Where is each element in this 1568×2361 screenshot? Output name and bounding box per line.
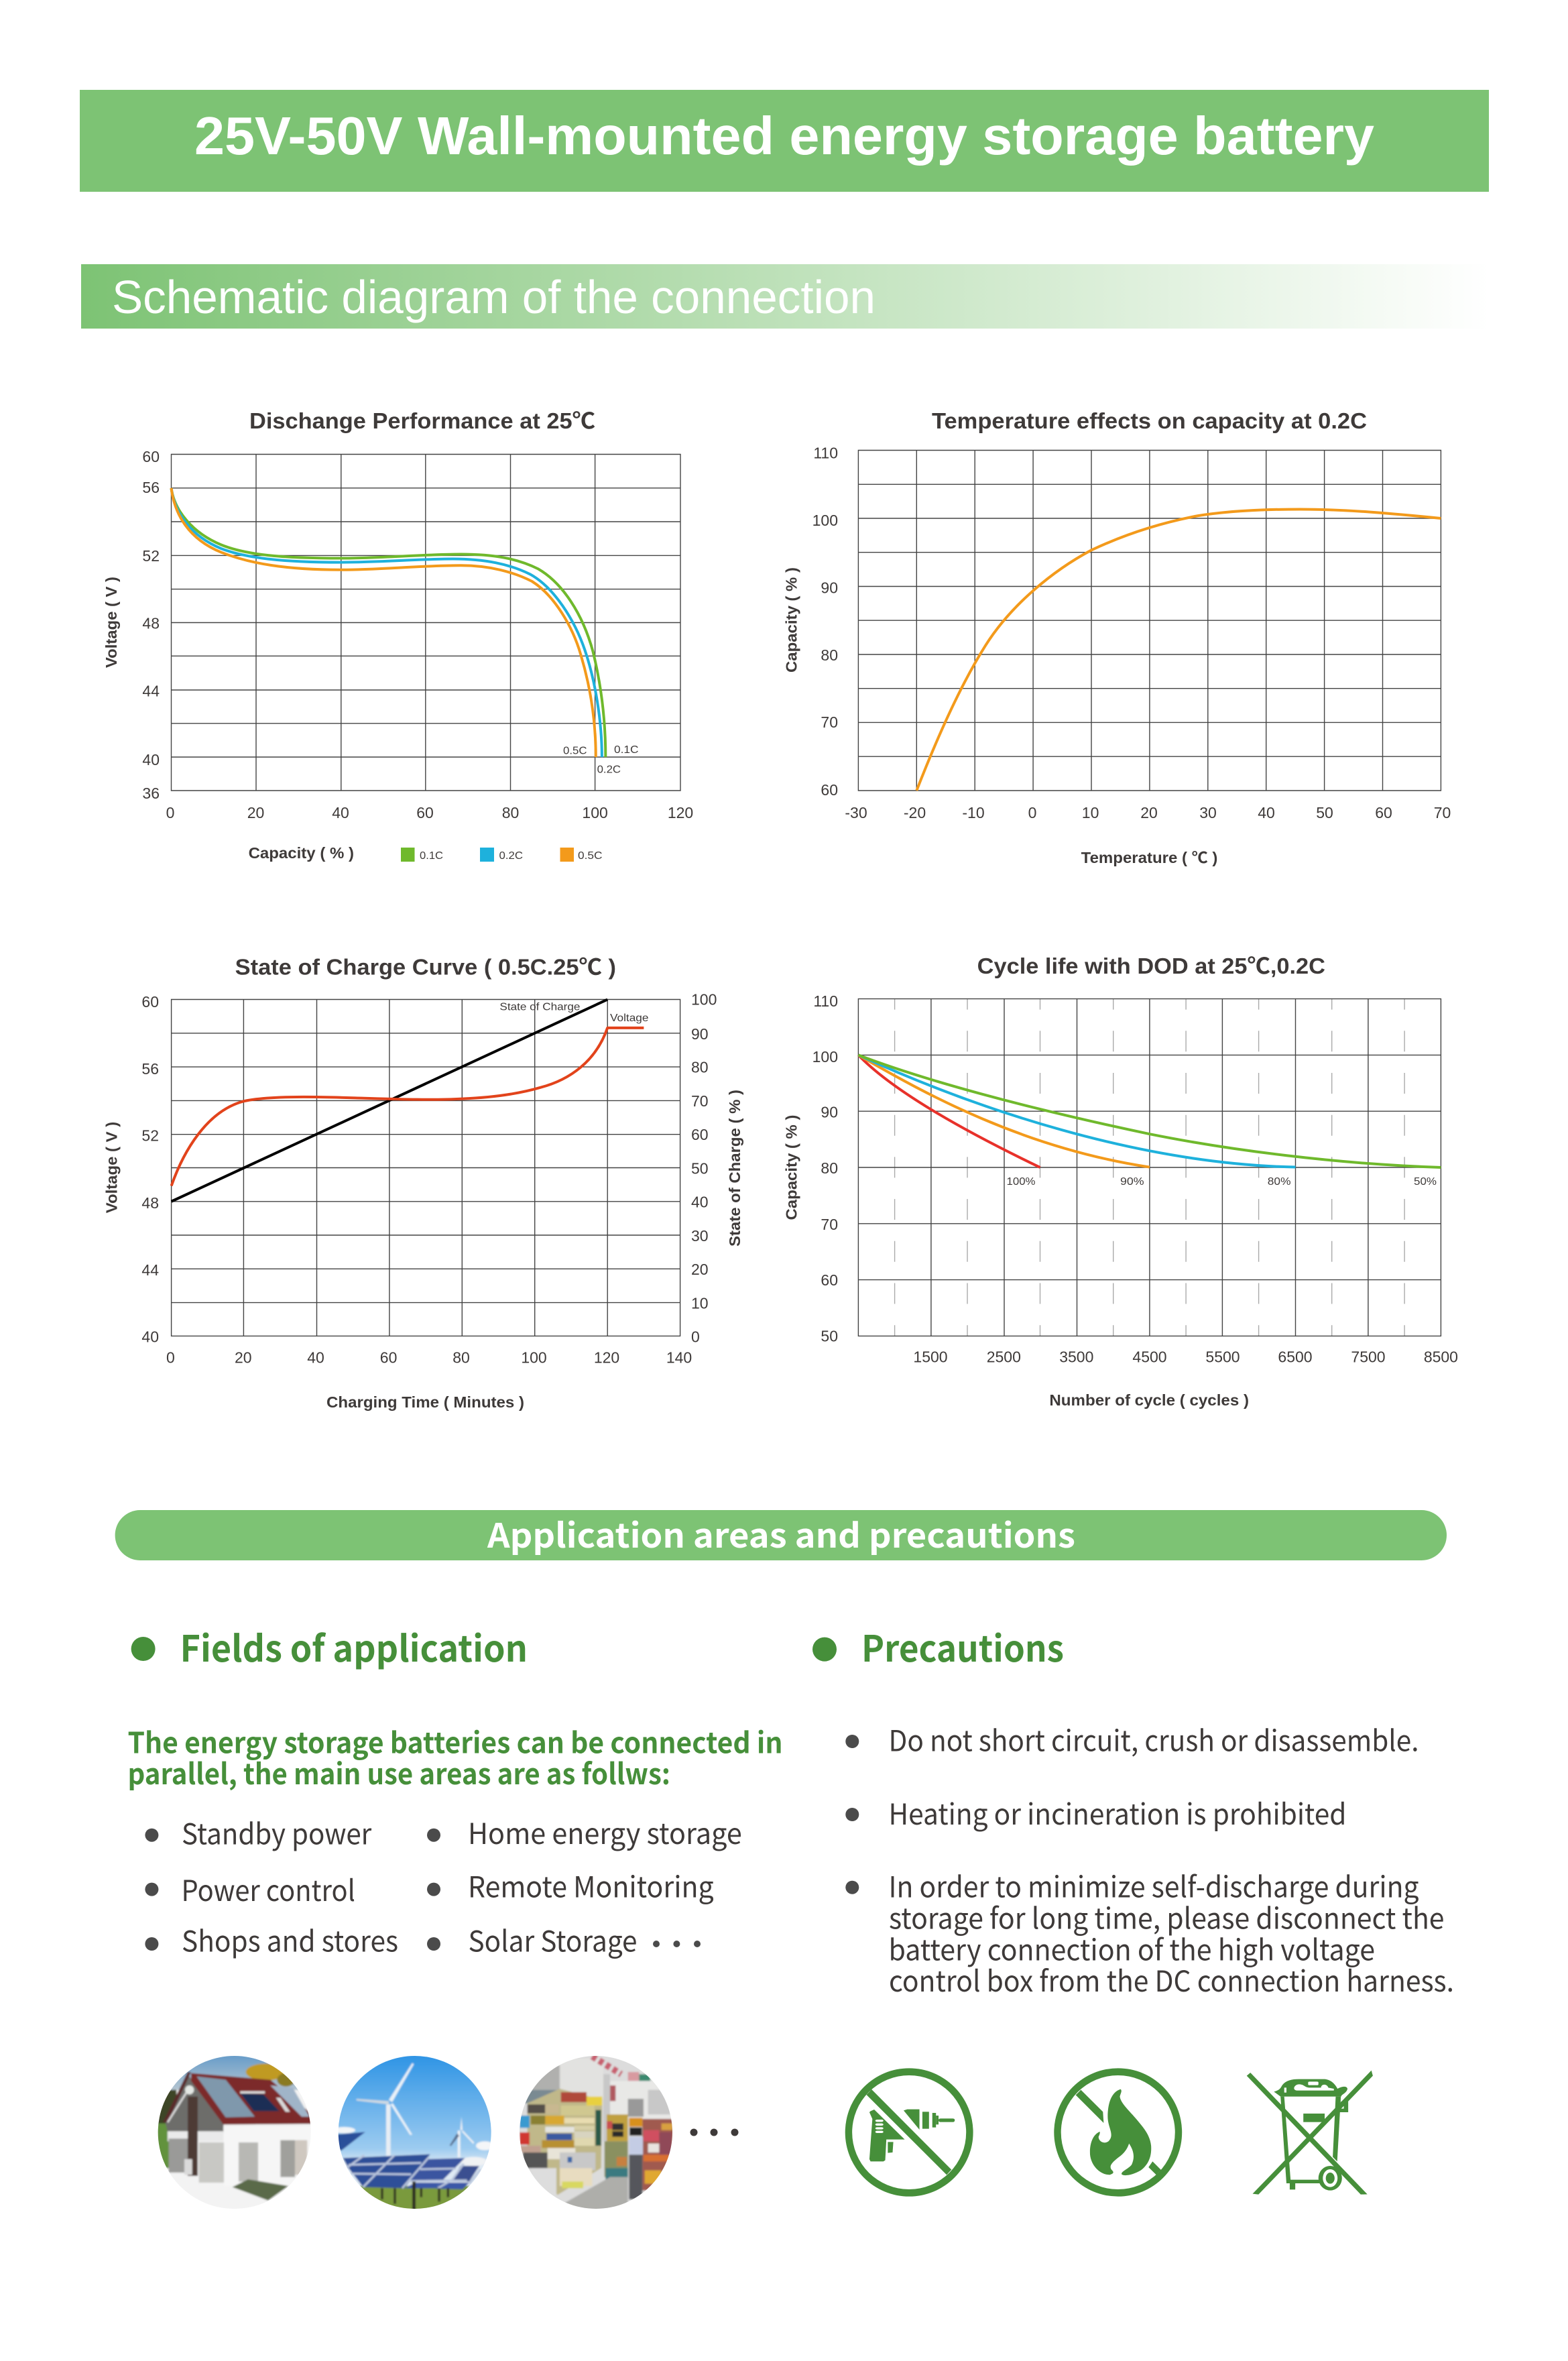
precautions list: Do not short circuit, crush or disassemble. <box>889 1719 1419 1760</box>
heading: Precautions <box>861 1619 1064 1672</box>
right y axis labels: 30 <box>691 1227 709 1245</box>
right y axis labels: 60 <box>691 1126 709 1143</box>
plot grid <box>172 999 680 1336</box>
x axis labels: 40 <box>332 804 349 821</box>
application list: Shops and stores <box>182 1918 398 1960</box>
curve labels: 0.5C <box>563 746 587 756</box>
y axis labels: 40 <box>142 751 160 768</box>
x axis labels: 40 <box>307 1348 324 1366</box>
right y axis labels: 100 <box>691 991 717 1009</box>
x axis labels <box>845 804 1451 821</box>
curve labels: 100% <box>1007 1176 1035 1188</box>
x axis labels: 120 <box>594 1348 619 1366</box>
left y axis title: Voltage ( V ) <box>103 1122 121 1213</box>
x axis labels: 60 <box>1375 804 1392 821</box>
intro text: The energy storage batteries can be connected in <box>127 1721 783 1762</box>
right y axis title: State of Charge ( % ) <box>726 1090 743 1247</box>
x axis labels <box>166 1348 692 1366</box>
chart title: State of Charge Curve ( 0.5C.25℃ ) <box>235 954 616 979</box>
plot grid <box>858 999 1441 1336</box>
x axis labels: -10 <box>962 804 985 821</box>
curve labels: 80% <box>1268 1176 1291 1188</box>
y axis title: Capacity ( % ) <box>783 1114 800 1220</box>
application list: Solar Storage <box>468 1918 637 1960</box>
curves <box>858 1055 1441 1167</box>
x axis title: Temperature ( ℃ ) <box>1081 849 1217 866</box>
x axis labels <box>913 1348 1458 1365</box>
chart title: Cycle life with DOD at 25℃,0.2C <box>977 954 1325 978</box>
title banner: 25V-50V Wall-mounted energy storage battery <box>194 106 1375 166</box>
y axis labels <box>812 444 838 799</box>
x axis labels: 50 <box>1316 804 1333 821</box>
right y axis labels: 50 <box>691 1160 709 1177</box>
y axis labels: 110 <box>813 992 838 1010</box>
precautions list: battery connection of the high voltage <box>889 1927 1375 1969</box>
y axis labels: 36 <box>142 785 160 802</box>
chart title: Temperature effects on capacity at 0.2C <box>932 408 1367 433</box>
y axis labels: 110 <box>813 444 838 461</box>
y axis labels: 100 <box>812 1048 838 1066</box>
line chart: temperature effects <box>783 408 1451 866</box>
application list: Power control <box>181 1868 355 1910</box>
icon: no disassembly drill <box>845 2068 973 2197</box>
y axis title: Voltage ( V ) <box>103 577 120 668</box>
x axis labels: 0 <box>1028 804 1036 821</box>
y axis labels: 80 <box>821 646 838 664</box>
x axis labels: 20 <box>247 804 264 821</box>
right y axis labels: 20 <box>691 1261 709 1278</box>
x axis labels: 20 <box>235 1348 252 1366</box>
y axis labels: 44 <box>142 683 160 700</box>
y axis labels <box>142 448 160 802</box>
y axis labels: 48 <box>142 614 160 632</box>
curve labels: 50% <box>1414 1176 1437 1188</box>
x axis labels: 0 <box>166 804 174 821</box>
x axis title: Number of cycle ( cycles ) <box>1049 1391 1249 1409</box>
x axis labels: 10 <box>1082 804 1099 821</box>
x axis title: Charging Time ( Minutes ) <box>326 1393 524 1411</box>
application photos <box>154 2052 677 2213</box>
x axis labels: 0 <box>166 1348 175 1366</box>
precautions list: Heating or incineration is prohibited <box>889 1792 1346 1833</box>
curve labels <box>563 744 638 775</box>
curve labels: 0.2C <box>597 764 621 775</box>
line chart: cycle life <box>783 954 1458 1409</box>
x axis labels: 100 <box>521 1348 547 1366</box>
x axis labels: 120 <box>668 804 693 821</box>
x axis labels: 1500 <box>913 1348 948 1365</box>
precautions list <box>845 1719 1454 2000</box>
curves <box>172 1000 644 1202</box>
left y axis labels: 40 <box>141 1328 159 1345</box>
intro text: parallel, the main use areas are as follws: <box>127 1751 670 1793</box>
precautions list: In order to minimize self-discharge during <box>889 1864 1419 1906</box>
right y axis labels: 40 <box>691 1194 709 1211</box>
panel: precautions <box>812 1619 1454 2000</box>
plot grid <box>858 451 1441 791</box>
curve labels <box>1007 1176 1437 1188</box>
y axis labels: 52 <box>142 547 160 565</box>
legend: 0.2C <box>499 850 523 862</box>
x axis labels: 3500 <box>1059 1348 1093 1365</box>
x axis labels: 60 <box>380 1348 397 1366</box>
ellipsis dots <box>690 2128 739 2136</box>
right y axis labels: 0 <box>691 1328 700 1345</box>
x axis labels: 4500 <box>1132 1348 1167 1365</box>
x axis labels: 70 <box>1434 804 1451 821</box>
y axis labels: 56 <box>142 479 160 496</box>
y axis labels: 80 <box>821 1159 838 1177</box>
x axis labels: 7500 <box>1351 1348 1386 1365</box>
left y axis labels: 44 <box>141 1261 159 1279</box>
curves <box>171 488 605 757</box>
icon: no trash bin <box>1247 2071 1373 2195</box>
photo: house with solar roof <box>154 2052 315 2213</box>
y axis title: Capacity ( % ) <box>783 567 800 673</box>
curve labels: 0.1C <box>614 744 638 756</box>
x axis labels: 30 <box>1199 804 1217 821</box>
left y axis labels <box>141 993 159 1345</box>
plot grid <box>172 455 680 791</box>
application list: Standby power <box>182 1812 372 1853</box>
right y axis labels <box>691 991 717 1345</box>
legend <box>401 848 602 862</box>
x axis labels: 60 <box>416 804 434 821</box>
line chart: state of charge <box>103 954 743 1411</box>
left y axis labels: 56 <box>141 1060 159 1078</box>
section pill: application areas and precautions <box>115 1509 1447 1560</box>
right y axis labels: 10 <box>691 1294 709 1312</box>
x axis labels: 8500 <box>1424 1348 1458 1365</box>
intro text <box>127 1721 783 1793</box>
curve labels: 90% <box>1120 1176 1144 1188</box>
curve <box>916 509 1441 791</box>
x axis labels: 6500 <box>1278 1348 1313 1365</box>
legend: 0.1C <box>420 850 443 862</box>
x axis labels: 80 <box>453 1348 470 1366</box>
x axis labels: -30 <box>845 804 867 821</box>
application list: Home energy storage <box>468 1811 742 1853</box>
y axis labels: 50 <box>821 1328 838 1345</box>
y axis labels <box>812 992 838 1345</box>
x axis labels: 140 <box>666 1348 692 1366</box>
chart title: Dischange Performance at 25℃ <box>249 408 595 433</box>
x axis labels: 100 <box>582 804 608 821</box>
section banner: schematic diagram <box>81 264 1489 329</box>
application list <box>145 1811 742 1960</box>
x axis labels: 2500 <box>987 1348 1021 1365</box>
legend: 0.5C <box>578 850 602 862</box>
heading: Fields of application <box>180 1619 528 1672</box>
panel: fields of application <box>127 1619 783 1960</box>
left y axis labels: 48 <box>141 1194 159 1212</box>
x axis labels: 20 <box>1140 804 1158 821</box>
y axis labels: 90 <box>821 1104 838 1121</box>
section pill: application areas and precautions: Application areas and precautions <box>487 1509 1075 1558</box>
precautions list: storage for long time, please disconnect the <box>889 1896 1444 1937</box>
y axis labels: 90 <box>821 579 838 597</box>
x axis title: Capacity ( % ) <box>249 844 354 862</box>
curve labels: Voltage <box>610 1013 649 1024</box>
x axis labels: 40 <box>1258 804 1275 821</box>
photo: wind turbines and solar panels <box>338 2056 491 2209</box>
left y axis labels: 60 <box>141 993 159 1011</box>
x axis labels: 5500 <box>1205 1348 1240 1365</box>
right y axis labels: 80 <box>691 1059 709 1076</box>
curve labels <box>499 1001 649 1024</box>
right y axis labels: 90 <box>691 1025 709 1043</box>
icon: no fire <box>1054 2068 1182 2197</box>
application list: Remote Monitoring <box>468 1864 714 1906</box>
x axis labels: 80 <box>502 804 519 821</box>
precautions list: control box from the DC connection harness. <box>889 1959 1454 2000</box>
title banner <box>80 90 1489 192</box>
section banner: schematic diagram: Schematic diagram of the connection <box>112 271 876 323</box>
y axis labels: 60 <box>142 448 160 465</box>
right y axis labels: 70 <box>691 1092 709 1110</box>
line chart: discharge performance <box>103 408 693 862</box>
y axis labels: 60 <box>821 781 838 799</box>
photo: convenience store aisle <box>516 2052 677 2213</box>
y axis labels: 60 <box>821 1271 838 1289</box>
x axis labels: -20 <box>904 804 926 821</box>
left y axis labels: 52 <box>141 1127 159 1144</box>
y axis labels: 70 <box>821 713 838 731</box>
x axis labels <box>166 804 693 821</box>
curve labels: State of Charge <box>499 1001 581 1013</box>
y axis labels: 100 <box>812 512 838 529</box>
y axis labels: 70 <box>821 1216 838 1233</box>
